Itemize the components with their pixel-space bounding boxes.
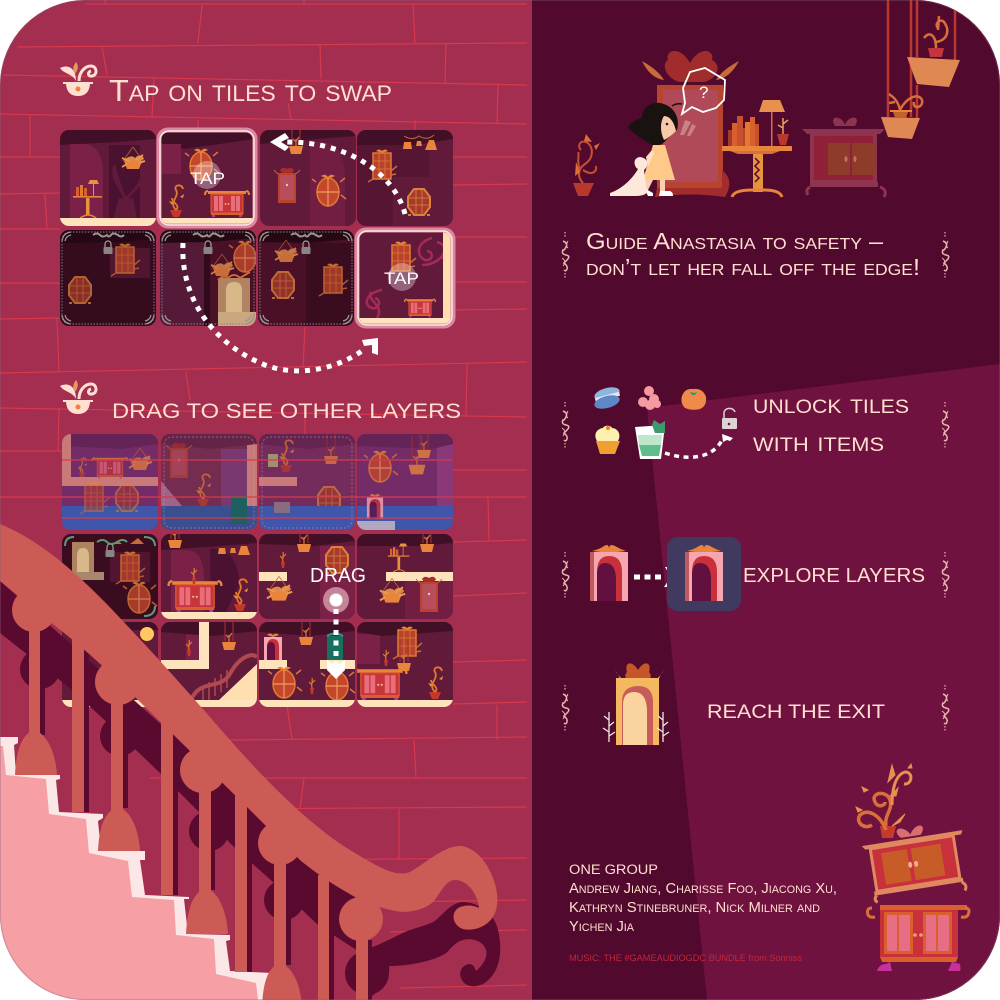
lower tile 7 bbox=[259, 613, 355, 707]
brick wall lines bbox=[0, 0, 527, 988]
stair treads bbox=[0, 737, 272, 1000]
text: guide Anastasia bbox=[586, 228, 920, 280]
tile 5 locked bbox=[60, 230, 156, 326]
text: guide Anastasia: don’t let her fall off the edge! bbox=[586, 254, 920, 280]
arrow: layer change bbox=[634, 567, 680, 587]
lower tile 2 bbox=[161, 534, 257, 619]
icon: door on other layer bbox=[667, 537, 741, 611]
lower cabinet bbox=[868, 905, 969, 971]
tap marker 2 bbox=[384, 263, 419, 291]
heading: drag to see other layers: DRAG TO SEE OTHER LAYERS bbox=[112, 400, 461, 423]
stair carpet bbox=[0, 746, 258, 1000]
icon: exit door bbox=[603, 663, 669, 745]
tile 8 selected bbox=[357, 230, 453, 326]
right panel dark bbox=[532, 0, 1000, 1000]
ornaments: explore row bbox=[562, 552, 949, 598]
tile 3 bbox=[260, 122, 356, 226]
tile 7 locked bbox=[258, 230, 354, 326]
staircase bbox=[0, 524, 500, 1000]
text: guide Anastasia: Guide Anastasia to safety – bbox=[586, 228, 883, 254]
drag marker: DRAG bbox=[310, 565, 366, 587]
icon: open lock bbox=[722, 408, 737, 429]
wall lines through overlay bbox=[62, 460, 453, 518]
right panel lighter wedge bbox=[647, 364, 1000, 1000]
Anastasia bbox=[610, 103, 682, 196]
heading: tap on tiles bbox=[60, 62, 391, 101]
panel: overlay layer tiles bbox=[62, 426, 453, 531]
speech bubble: ? bbox=[699, 83, 708, 102]
lower tile 6 bbox=[161, 618, 257, 707]
arrow: swap top tiles bbox=[270, 133, 405, 214]
overlay tile 3 bbox=[259, 432, 355, 531]
speech bubble bbox=[682, 68, 725, 114]
illustration: stacked cabinets and plant bbox=[856, 764, 972, 971]
mirror bbox=[642, 51, 739, 197]
tile 2 selected bbox=[159, 130, 255, 226]
tall plant bbox=[856, 764, 912, 838]
icon: drink bbox=[635, 420, 665, 459]
ornaments: unlock row bbox=[562, 402, 949, 448]
tile 6 locked bbox=[160, 230, 263, 326]
overlay tile 1 bbox=[62, 434, 158, 531]
hanging planters bbox=[881, 0, 960, 139]
heading: drag to see other layers bbox=[60, 380, 460, 418]
heading: tap on tiles: Tap on tiles to swap bbox=[109, 73, 392, 108]
arrow: swap lower tiles bbox=[183, 243, 378, 371]
text: unlock tiles with items: with items bbox=[753, 427, 884, 457]
tap marker 2: TAP bbox=[384, 269, 419, 288]
icon: cupcake bbox=[595, 426, 620, 454]
newel knobs bbox=[12, 588, 383, 941]
text: explore layers: EXPLORE LAYERS bbox=[743, 565, 925, 587]
icon: pink candies bbox=[638, 386, 661, 410]
text: credits: MUSIC: THE #GAMEAUDIOGDC BUNDLE from Sonniss bbox=[569, 953, 802, 963]
tile 4 bbox=[357, 130, 453, 226]
text: reach the exit: REACH THE EXIT bbox=[707, 702, 885, 723]
icon: door before bbox=[590, 545, 628, 601]
arrow: drink to lock bbox=[665, 434, 733, 457]
icon: orange sweet bbox=[681, 389, 706, 410]
tap marker 1: TAP bbox=[190, 169, 225, 188]
text: unlock tiles with items: unlock tiles bbox=[753, 389, 909, 419]
lower tile 1 locked bbox=[62, 534, 158, 619]
text: unlock tiles with items bbox=[753, 389, 909, 457]
cabinet bbox=[802, 118, 885, 197]
panel: tap tile grid bbox=[60, 122, 453, 326]
overlay tile 4 bbox=[357, 426, 453, 531]
panel: lower layer tiles bbox=[62, 516, 453, 707]
text: credits: Yichen Jia bbox=[569, 918, 635, 935]
overlay tile 2 bbox=[161, 434, 257, 531]
handrail bbox=[0, 524, 497, 930]
lower tile 8 bbox=[354, 622, 453, 707]
text: credits: ONE GROUP bbox=[569, 862, 658, 877]
text: credits: Andrew Jiang, Charisse Foo, Jiacong Xu, bbox=[569, 880, 837, 897]
ornaments: exit row bbox=[562, 685, 949, 731]
illustration: Anastasia and furniture bbox=[573, 0, 960, 197]
text: credits bbox=[569, 862, 837, 963]
ornaments: guide row bbox=[562, 232, 949, 278]
text: credits: Kathryn Stinebruner, Nick Milner and bbox=[569, 899, 820, 916]
drag marker bbox=[310, 565, 366, 679]
lower tile 5 bbox=[62, 622, 158, 707]
balusters bbox=[15, 615, 368, 1000]
tilted upper cabinet bbox=[860, 819, 972, 905]
potted plant bbox=[573, 134, 600, 196]
icon: macaron bbox=[593, 385, 621, 411]
banister shadow bbox=[0, 581, 500, 1000]
lower tile 3 bbox=[259, 534, 355, 619]
side table with lamp and books bbox=[722, 100, 792, 197]
tap marker 1 bbox=[190, 161, 225, 189]
tile 1 bbox=[60, 130, 156, 226]
lower tile 4 bbox=[357, 534, 453, 619]
